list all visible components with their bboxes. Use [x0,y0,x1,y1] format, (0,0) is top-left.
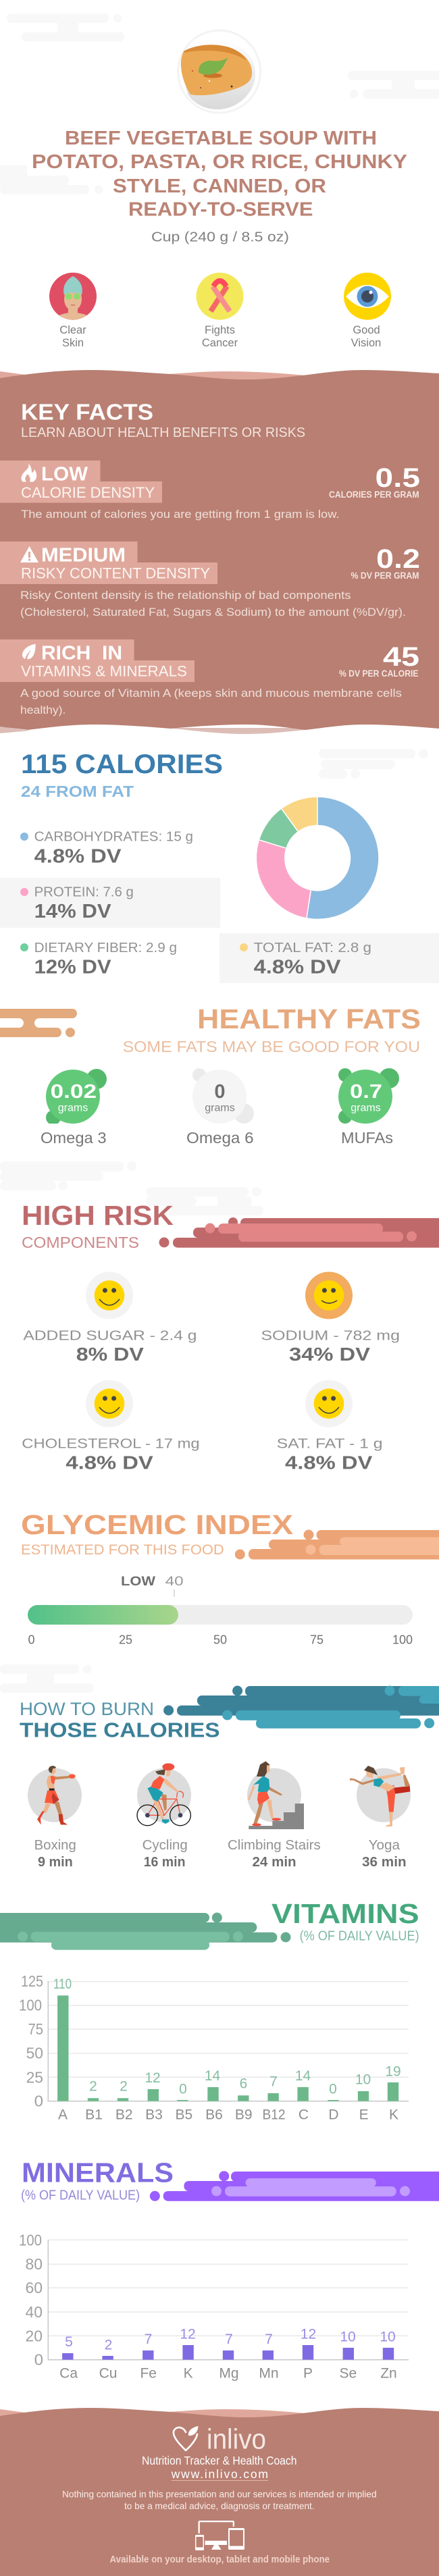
gauge label: 40 [165,1575,184,1589]
fact: low calorie density: CALORIES PER GRAM [329,490,419,500]
legend: carbohydrates [20,830,193,868]
item: saturated fat: 4.8% DV [285,1452,373,1473]
bar chart: vitamins: E [359,2107,369,2123]
panel: high risk [22,1200,439,1473]
logo: inlivo [174,2423,266,2455]
benefit: clear skin: Skin [62,337,84,349]
legend: protein: 14% DV [34,901,111,922]
fact: medium risky content: 0.2 [376,544,420,574]
stat: omega 6: 0 [214,1081,226,1103]
fact: medium risky content: Risky Content density is the relationship of bad components [20,589,351,602]
stat: omega 3: 0.02 [51,1081,97,1103]
disclaimer: to be a medical advice, diagnosis or treatment. [124,2500,315,2511]
stat: mufas: grams [351,1103,381,1114]
fact: medium risky content: % DV PER GRAM [351,571,419,581]
bar chart: vitamins: 125 [21,1972,43,1990]
bar chart: minerals: Mg [219,2366,239,2382]
benefit: fights cancer [196,273,243,349]
title: BEEF VEGETABLE SOUP WITH [65,128,377,149]
bar chart: vitamins: B5 [176,2107,192,2123]
fact: low calorie density: CALORIE DENSITY [21,484,155,501]
bar chart: vitamins: B6 [205,2107,223,2123]
subheading: ESTIMATED FOR THIS FOOD [21,1542,224,1558]
activity: cycling: 16 min [144,1855,185,1870]
bar chart: minerals: 7 [265,2332,273,2347]
fact: low calorie density: 0.5 [376,463,420,493]
fact: rich in vitamins and minerals: VITAMINS & MINERALS [21,663,187,680]
fact: medium risky content: (Cholesterol, Saturated Fat, Sugars & Sodium) to the amount (%DV/gr). [20,606,406,619]
decorative blob: orange [0,1009,77,1037]
fact: medium risky content [0,542,420,619]
fact: low calorie density: The amount of calories you are getting from 1 gram is low. [21,508,340,521]
gauge scale: 50 [213,1633,227,1646]
icon: boxer [28,1766,82,1824]
donut chart [259,797,365,918]
fact: medium risky content: MEDIUM [41,544,126,566]
activity: climbing stairs [228,1761,321,1870]
item: added sugar: 8% DV [76,1344,144,1365]
gauge label: LOW [121,1575,155,1589]
bar chart: minerals [19,2231,409,2382]
decorative blob: red [159,1217,439,1248]
panel: glycemic index [21,1509,439,1646]
decorative blob: green [0,1912,290,1950]
heading: HOW TO BURN [20,1699,154,1719]
subheading: COMPONENTS [22,1234,139,1251]
decorative blob: orange [235,1530,439,1560]
activity: yoga: 36 min [362,1855,407,1870]
availability note: Available on your desktop, tablet and mobile phone [109,2554,330,2565]
website link: www.inlivo.com [171,2467,268,2481]
activity: boxing: 9 min [38,1855,73,1870]
disclaimer: Nothing contained in this presentation and our services is intended or implied [62,2489,377,2500]
heading: HEALTHY FATS [197,1003,421,1034]
fact: medium risky content: RISKY CONTENT DENSITY [21,565,210,582]
bar chart: vitamins: 12 [145,2070,161,2086]
bar chart: minerals: 10 [340,2329,356,2344]
icon: leaf [22,644,36,659]
subheading: (% OF DAILY VALUE) [300,1929,419,1944]
subheading: (% OF DAILY VALUE) [21,2188,140,2203]
stat: omega 6: grams [205,1103,235,1114]
bar chart: vitamins: 75 [28,2020,43,2038]
activity: cycling [137,1763,191,1870]
heading: MINERALS [22,2157,174,2188]
legend: carbohydrates: 4.8% DV [34,846,122,868]
bar chart: vitamins: 10 [355,2072,371,2088]
bar chart: minerals: 0 [34,2351,43,2369]
legend: total fat [220,933,439,983]
benefit: fights cancer: Fights [205,324,235,336]
bar chart: minerals: 7 [145,2332,152,2347]
legend: dietary fiber [20,941,177,978]
gauge scale: 25 [119,1633,132,1646]
benefit: good vision: Good [353,324,380,336]
panel: vitamins [0,1898,419,2123]
legend: total fat: TOTAL FAT: 2.8 g [254,941,371,955]
decorative faint cloud shapes [0,14,439,1693]
item: added sugar [23,1272,197,1365]
fact: rich in vitamins and minerals: RICH IN [41,643,122,664]
activity: yoga [350,1766,411,1870]
bar chart: vitamins: 14 [205,2068,220,2084]
bar chart: vitamins [19,1972,409,2123]
title: STYLE, CANNED, OR [113,176,326,197]
item: added sugar: ADDED SUGAR - 2.4 g [23,1328,197,1344]
item: sodium: SODIUM - 782 mg [261,1328,400,1344]
heading: 115 CALORIES [21,750,223,779]
title: READY-TO-SERVE [128,199,313,220]
heading: GLYCEMIC INDEX [21,1509,293,1540]
bar chart: minerals: 10 [380,2329,396,2344]
bar chart: vitamins: C [299,2107,309,2123]
panel: how to burn calories: THOSE CALORIES [20,1718,220,1742]
item: saturated fat: SAT. FAT - 1 g [277,1436,383,1451]
decorative blob: purple [150,2171,439,2201]
bar chart: vitamins: B2 [115,2107,133,2123]
legend: dietary fiber: 12% DV [34,957,111,978]
bar chart: vitamins: 14 [295,2068,311,2084]
bar chart: minerals: Zn [380,2366,397,2382]
legend: total fat: 4.8% DV [254,957,341,978]
bar chart: vitamins: K [389,2107,398,2123]
stat: mufas: MUFAs [341,1129,393,1147]
panel: footer [0,2408,439,2576]
item: saturated fat [277,1380,383,1473]
bar chart: vitamins: 2 [120,2079,128,2095]
heading: KEY FACTS [21,400,153,425]
bar chart: minerals: Cu [99,2366,117,2382]
bar chart: minerals: 40 [26,2303,43,2321]
bar chart: minerals: 12 [180,2326,196,2342]
logo: inlivo: inlivo [207,2423,266,2455]
decorative blob: teal [163,1685,439,1729]
bar chart: vitamins: 0 [179,2082,187,2097]
subheading: SOME FATS MAY BE GOOD FOR YOU [123,1038,420,1055]
image: soup bowl [178,30,261,113]
subheading: 24 FROM FAT [21,783,134,800]
legend: protein: PROTEIN: 7.6 g [34,885,134,900]
fact: low calorie density: LOW [41,464,88,485]
disclaimer [62,2489,377,2511]
bar chart: vitamins: B9 [235,2107,253,2123]
activity: climbing stairs: 24 min [253,1855,296,1870]
fact: rich in vitamins and minerals: A good source of Vitamin A (keeps skin and mucous membrane cells [20,687,402,700]
panel: calories [0,750,439,983]
item: sodium [261,1272,400,1365]
icon: cyclist [137,1763,191,1826]
item: cholesterol: 4.8% DV [66,1452,153,1473]
stat: omega 6 [186,1068,254,1147]
bar chart: vitamins: 7 [269,2074,278,2089]
bar chart: minerals: 80 [26,2255,43,2273]
stat: omega 3 [41,1069,107,1147]
bar chart: minerals: 20 [26,2328,43,2345]
benefit: clear skin [49,273,97,349]
item: sodium: 34% DV [289,1344,370,1365]
benefit: fights cancer: Cancer [202,337,238,349]
icon: flame [22,463,36,482]
benefit: good vision: Vision [351,337,381,349]
bar chart: vitamins: 100 [19,1997,42,2014]
fact: rich in vitamins and minerals: % DV PER CALORIE [339,668,419,679]
panel: how to burn calories [20,1685,439,1870]
fact: rich in vitamins and minerals: healthy). [20,704,66,716]
item: cholesterol: CHOLESTEROL - 17 mg [22,1436,200,1451]
icon: warning triangle [20,546,38,562]
panel: minerals [19,2157,439,2382]
icon: yoga pose [350,1766,411,1826]
bar chart: minerals: 12 [301,2326,316,2342]
bar chart: minerals: 2 [105,2337,112,2352]
legend: carbohydrates: CARBOHYDRATES: 15 g [34,830,193,845]
bar chart: vitamins: 110 [53,1976,72,1992]
fact: rich in vitamins and minerals: 45 [383,642,419,672]
bar chart: minerals: Mn [259,2366,279,2382]
subheading: LEARN ABOUT HEALTH BENEFITS OR RISKS [21,425,305,440]
benefit: good vision [344,273,391,349]
activity: boxing: Boxing [34,1838,76,1853]
gauge scale: 75 [310,1633,324,1646]
bar chart: minerals: 5 [65,2334,73,2350]
gauge scale: 0 [28,1633,35,1646]
bar chart: vitamins: 19 [385,2064,401,2079]
stat: mufas [338,1068,399,1147]
bar chart: vitamins: B3 [145,2107,163,2123]
stat: mufas: 0.7 [350,1081,382,1103]
panel: key facts [0,370,439,734]
fact: low calorie density [0,461,420,521]
bar chart: minerals: 7 [225,2332,233,2347]
gauge scale: 100 [392,1633,413,1646]
stat: omega 3: Omega 3 [41,1129,107,1147]
legend: protein [0,878,220,928]
stat: omega 6: Omega 6 [186,1129,254,1147]
activity: yoga: Yoga [369,1838,401,1853]
serving size: Cup (240 g / 8.5 oz) [151,230,289,244]
activity: climbing stairs: Climbing Stairs [228,1838,321,1853]
bar chart: vitamins: 2 [89,2079,97,2095]
benefit: clear skin: Clear [59,324,86,336]
heading: VITAMINS [272,1898,419,1929]
tagline: Nutrition Tracker & Health Coach [142,2454,297,2467]
stat: omega 3: grams [58,1103,88,1114]
bar chart: vitamins: 50 [26,2045,43,2062]
bar chart: vitamins: 25 [26,2068,43,2086]
icon: devices [195,2521,244,2550]
bar chart: minerals: 100 [19,2231,42,2249]
title [32,128,407,220]
item: cholesterol [22,1380,200,1473]
bar chart: vitamins: B1 [85,2107,103,2123]
gauge scale [28,1633,413,1646]
gauge bar [28,1605,413,1625]
icon: stair climber [247,1761,304,1829]
panel: healthy fats [0,1003,421,1147]
bar chart: minerals: Fe [140,2366,157,2382]
bar chart: vitamins: 6 [240,2076,247,2092]
fact: rich in vitamins and minerals [0,639,419,716]
gauge label [121,1575,184,1597]
bar chart: minerals: Ca [59,2366,78,2382]
activity: boxing [28,1766,82,1870]
title: POTATO, PASTA, OR RICE, CHUNKY [32,151,407,173]
bar chart: vitamins: B12 [262,2107,285,2123]
bar chart: minerals: Se [340,2366,357,2382]
bar chart: vitamins: 0 [329,2082,337,2097]
bar chart: vitamins: D [328,2107,339,2123]
heading: HIGH RISK [22,1200,174,1231]
bar chart: minerals: P [303,2366,313,2382]
activity: cycling: Cycling [143,1838,188,1853]
bar chart: minerals: 60 [26,2279,43,2296]
legend: dietary fiber: DIETARY FIBER: 2.9 g [34,941,177,955]
bar chart: vitamins: A [58,2107,68,2123]
bar chart: minerals: K [184,2366,193,2382]
bar chart: vitamins: 0 [34,2092,43,2109]
